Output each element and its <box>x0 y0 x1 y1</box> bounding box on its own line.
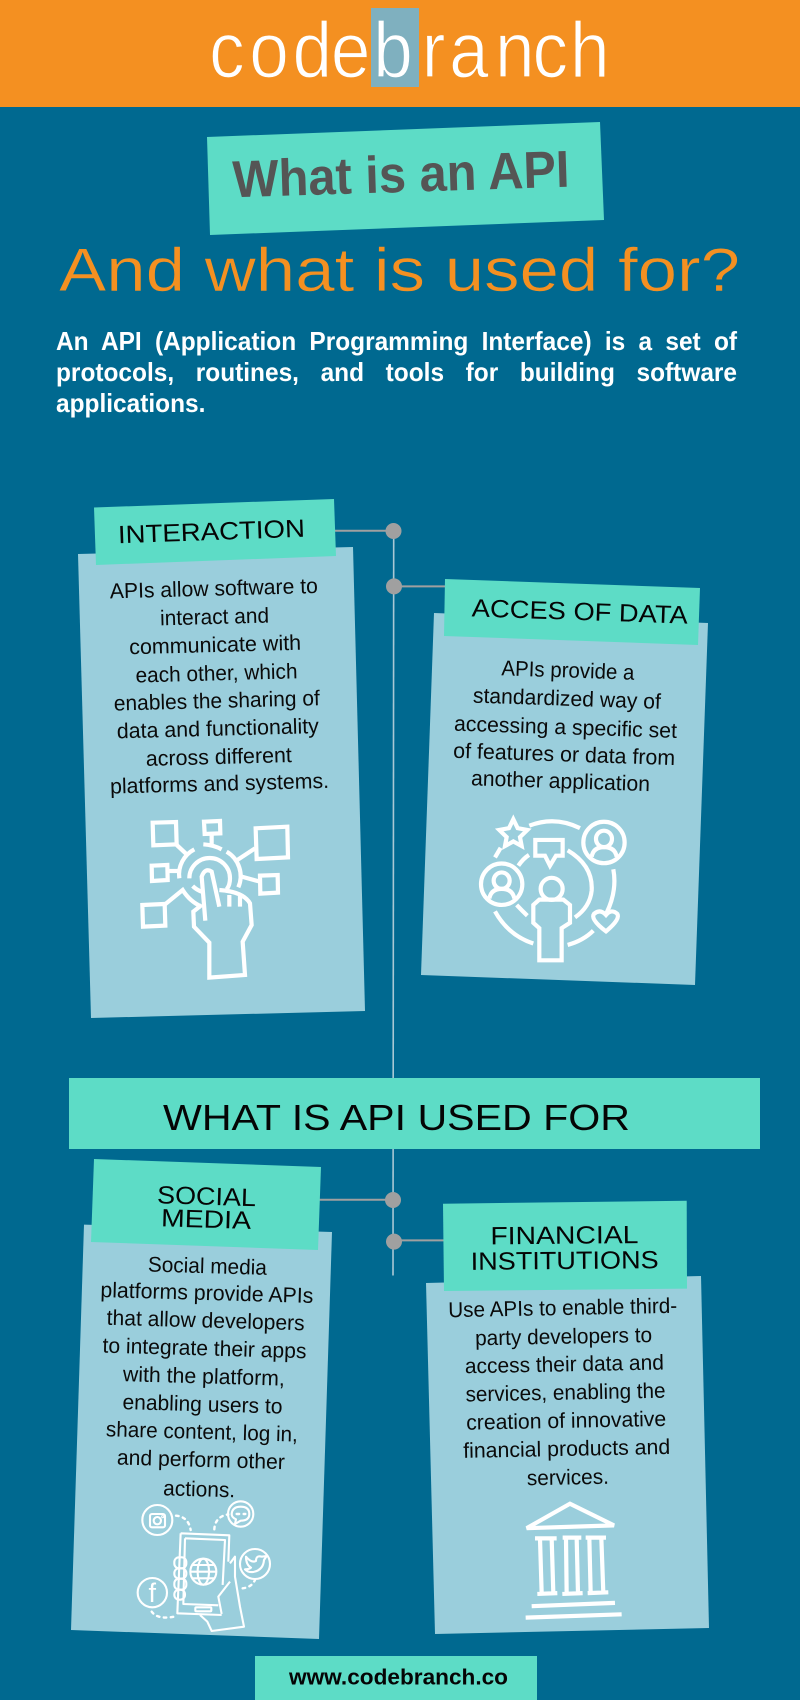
financial institutions text: access their data and <box>465 1350 664 1378</box>
icon: people network <box>481 819 625 960</box>
financial institutions heading <box>443 1201 687 1291</box>
panel: social media <box>71 1159 332 1639</box>
interaction text: communicate with <box>129 631 301 659</box>
timeline connectors <box>318 523 446 1276</box>
access of data text <box>453 656 677 796</box>
financial institutions text: party developers to <box>475 1323 652 1350</box>
interaction text: each other, which <box>135 659 298 688</box>
intro paragraph <box>56 326 738 418</box>
social media heading <box>91 1159 321 1250</box>
access of data heading <box>444 579 700 645</box>
access of data text: standardized way of <box>473 684 661 714</box>
interaction text: enables the sharing of <box>114 686 320 716</box>
financial institutions text: services, enabling the <box>465 1379 666 1407</box>
financial institutions text: financial products and <box>463 1435 670 1463</box>
interaction text: interact and <box>160 604 269 630</box>
access of data text: another application <box>471 766 650 796</box>
interaction text <box>110 574 329 799</box>
social media text: that allow developers <box>106 1306 305 1335</box>
financial institutions heading: FINANCIAL <box>490 1221 639 1250</box>
panel: financial institutions <box>426 1201 709 1634</box>
header band with logo <box>0 0 800 107</box>
financial institutions text: services. <box>527 1465 609 1490</box>
financial institutions text: creation of innovative <box>466 1407 666 1435</box>
footer url: www.codebranch.co <box>288 1664 508 1690</box>
intro paragraph: protocols, routines, and tools for building software <box>56 357 737 387</box>
social media text: enabling users to <box>122 1390 283 1419</box>
interaction text: APIs allow software to <box>110 574 318 603</box>
social media heading: SOCIAL <box>157 1181 257 1212</box>
icon: hand touching network <box>142 821 288 978</box>
access of data text: APIs provide a <box>501 656 635 685</box>
social media text: and perform other <box>117 1445 285 1474</box>
social media text <box>100 1253 314 1502</box>
social media text: Social media <box>148 1253 267 1280</box>
title: What is an API <box>207 122 604 235</box>
title: What is an API: What is an API <box>232 141 570 209</box>
interaction text: data and functionality <box>117 714 319 743</box>
intro paragraph: applications. <box>56 388 205 418</box>
interaction text: platforms and systems. <box>110 769 329 799</box>
access of data text: of features or data from <box>453 739 676 770</box>
section banner: WHAT IS API USED FOR <box>163 1097 630 1138</box>
icon glyph: f: f <box>149 1578 157 1608</box>
section banner <box>69 1078 760 1149</box>
social media text: to integrate their apps <box>102 1334 307 1363</box>
interaction heading: INTERACTION <box>117 515 305 549</box>
social media text: share content, log in, <box>106 1417 298 1447</box>
social media text: platforms provide APIs <box>100 1278 314 1308</box>
financial institutions text <box>448 1294 677 1490</box>
interaction heading <box>94 499 336 565</box>
interaction text: across different <box>146 743 292 771</box>
subtitle: And what is used for? <box>59 236 740 304</box>
financial institutions text: Use APIs to enable third- <box>448 1294 677 1322</box>
panel: interaction <box>78 499 365 1018</box>
social media text: with the platform, <box>122 1362 285 1391</box>
social media heading: MEDIA <box>161 1204 252 1235</box>
intro paragraph: An API (Application Programming Interface) is a set of <box>56 326 737 356</box>
access of data heading: ACCES OF DATA <box>471 594 689 630</box>
header band with logo: codebranch <box>209 6 610 94</box>
panel: access of data <box>421 579 708 985</box>
financial institutions heading: INSTITUTIONS <box>471 1246 659 1276</box>
footer url <box>255 1656 537 1700</box>
icon: bank building <box>526 1504 622 1618</box>
social media text: actions. <box>163 1476 236 1502</box>
access of data text: accessing a specific set <box>454 712 677 743</box>
icon: phone with social networks <box>138 1501 270 1631</box>
